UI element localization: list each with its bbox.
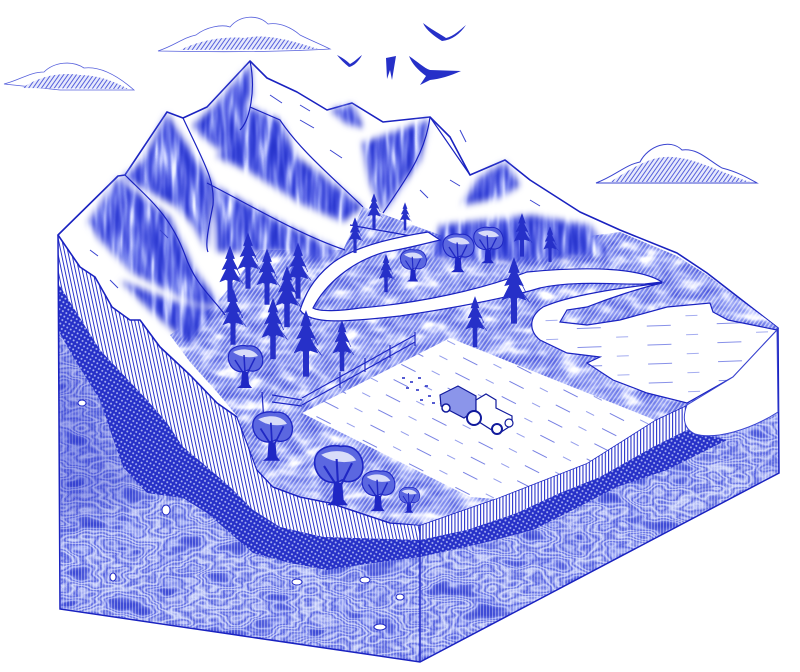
valley ground — [170, 207, 778, 525]
cloud: top centre — [158, 17, 330, 52]
right face: rock strata — [420, 410, 779, 662]
snow slope marks — [90, 95, 540, 288]
farm field — [302, 338, 655, 499]
right face: soil hatch layer — [420, 405, 687, 540]
block outlines — [58, 235, 779, 662]
left face: rock strata — [59, 312, 420, 662]
fence — [262, 332, 415, 438]
ice block at lake front — [684, 330, 778, 436]
birds flock — [337, 23, 466, 85]
river — [300, 232, 662, 321]
mountain ridgelines — [125, 61, 470, 315]
conifer forest — [220, 194, 558, 376]
lake — [532, 283, 777, 403]
cloud: right — [596, 144, 757, 183]
right face: dark gravel band — [420, 430, 727, 557]
mountain shaded faces — [88, 64, 610, 345]
deciduous trees — [228, 227, 503, 513]
cloud: left — [4, 63, 134, 90]
rock pebbles — [78, 400, 404, 630]
top surface: ground — [58, 61, 778, 525]
left face: dark gravel band — [58, 283, 420, 570]
left face: soil hatch layer — [58, 235, 420, 540]
tractor spreading seed — [402, 378, 513, 434]
